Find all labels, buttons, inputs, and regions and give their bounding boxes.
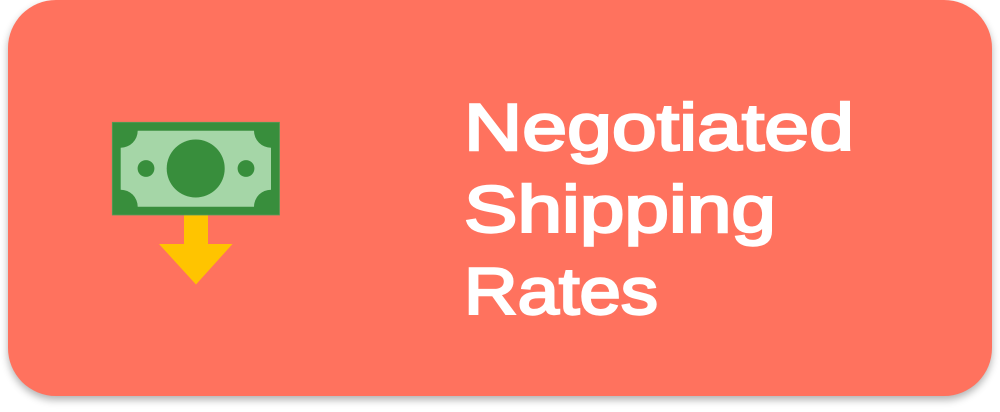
icon: dollar bill (112, 122, 280, 215)
heading: Negotiated Shipping Rates (464, 90, 854, 328)
heading: Negotiated Shipping Rates: Rates (464, 254, 658, 328)
heading: Negotiated Shipping Rates: Shipping (464, 172, 776, 246)
icon: dollar bill with down arrow (112, 122, 280, 284)
icon: down arrow (159, 215, 232, 284)
heading: Negotiated Shipping Rates: Negotiated (464, 90, 854, 164)
